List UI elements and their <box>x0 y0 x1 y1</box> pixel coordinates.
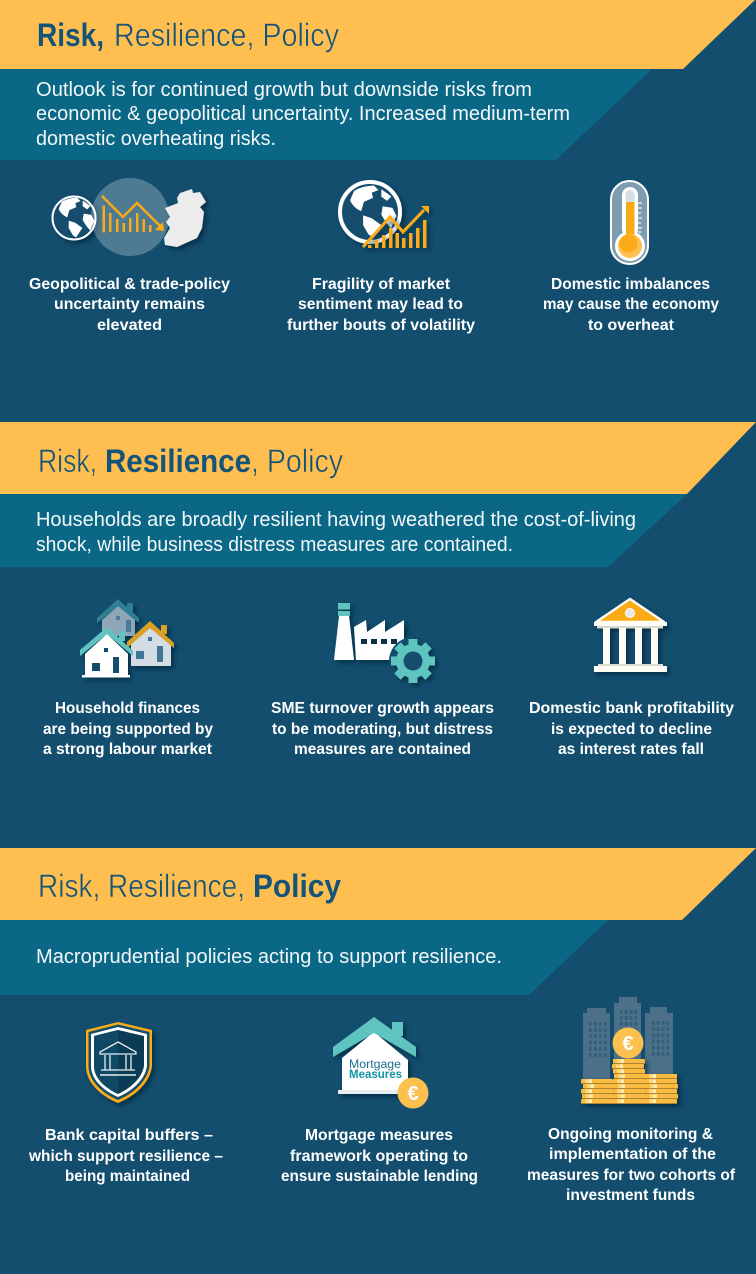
caption: market sentiment: further bouts of volatility <box>287 317 475 334</box>
icon: mortgage measures house: Measures <box>349 1067 402 1081</box>
caption: geopolitical: elevated <box>97 317 162 334</box>
caption: geopolitical: Geopolitical & trade-policy <box>29 276 230 293</box>
icon: houses <box>80 599 174 678</box>
intro text: resilience: Households are broadly resilient having weathered the cost-of-living <box>36 509 636 531</box>
heading: risk <box>37 17 339 53</box>
intro text: risk: Outlook is for continued growth but downside risks from <box>36 79 532 101</box>
heading: resilience: Resilience <box>105 443 251 479</box>
caption: bank profitability: is expected to decline <box>551 721 712 738</box>
icon: mortgage measures house: € <box>407 1083 419 1105</box>
panel: policy <box>0 848 756 1204</box>
intro band: resilience <box>0 494 687 567</box>
caption: sme turnover <box>271 700 494 758</box>
heading: risk: Risk, <box>37 17 104 53</box>
caption: capital buffers: being maintained <box>65 1168 190 1185</box>
caption: sme turnover: measures are contained <box>294 741 471 758</box>
caption: geopolitical <box>29 276 230 334</box>
caption: investment funds: implementation of the <box>549 1146 716 1163</box>
icon: buildings and coin stacks <box>581 997 678 1104</box>
icon: thermometer <box>611 181 648 264</box>
heading band: risk <box>0 0 755 69</box>
heading: policy: Policy <box>253 868 341 904</box>
icon: buildings and coin stacks: € <box>622 1033 634 1055</box>
heading: resilience: Risk, <box>38 443 97 479</box>
icon: factory and gear <box>334 603 437 685</box>
caption: investment funds: measures for two cohorts of <box>527 1167 736 1184</box>
icon: globe with rising chart <box>340 182 429 248</box>
caption: household finances: Household finances <box>55 700 200 717</box>
caption: capital buffers: which support resilience – <box>28 1148 223 1165</box>
caption: investment funds: investment funds <box>566 1187 695 1204</box>
icon: bank <box>594 599 667 672</box>
intro text: risk: domestic overheating risks. <box>36 128 276 150</box>
icon: mortgage measures house <box>333 1017 428 1108</box>
intro text: policy: Macroprudential policies acting to support resilience. <box>36 946 502 968</box>
heading band: resilience <box>0 422 756 494</box>
icon: shield with bank <box>86 1022 152 1103</box>
caption: mortgage framework: Mortgage measures <box>305 1127 453 1144</box>
caption: household finances: are being supported by <box>43 721 213 738</box>
caption: market sentiment: Fragility of market <box>312 276 450 293</box>
panel: risk <box>0 0 755 334</box>
intro band: policy <box>0 920 608 995</box>
panel: resilience <box>0 422 756 758</box>
intro text: resilience: shock, while business distress measures are contained. <box>36 534 513 556</box>
icon: mortgage measures house: Mortgage <box>349 1057 401 1071</box>
intro text: resilience <box>36 509 636 556</box>
caption: geopolitical: uncertainty remains <box>54 296 205 313</box>
caption: market sentiment: sentiment may lead to <box>298 296 463 313</box>
caption: domestic imbalances <box>543 276 719 334</box>
heading: resilience: , Policy <box>251 443 343 479</box>
caption: capital buffers: Bank capital buffers – <box>45 1127 213 1144</box>
caption: bank profitability: as interest rates fall <box>558 741 704 758</box>
caption: mortgage framework: framework operating to <box>290 1148 468 1165</box>
caption: domestic imbalances: to overheat <box>588 317 674 334</box>
heading: policy: Risk, Resilience, <box>38 868 245 904</box>
caption: sme turnover: SME turnover growth appears <box>271 700 494 717</box>
heading: resilience <box>38 443 343 479</box>
caption: household finances: a strong labour market <box>43 741 212 758</box>
intro band: risk <box>0 69 652 160</box>
caption: household finances <box>43 700 213 758</box>
caption: capital buffers <box>28 1127 223 1185</box>
caption: bank profitability <box>529 700 734 758</box>
intro text: risk <box>36 79 570 150</box>
caption: domestic imbalances: may cause the economy <box>543 296 719 313</box>
intro text: risk: economic & geopolitical uncertainty. Increased medium-term <box>36 103 570 125</box>
heading: risk: Resilience, Policy <box>114 17 339 53</box>
caption: domestic imbalances: Domestic imbalances <box>551 276 710 293</box>
caption: investment funds: Ongoing monitoring & <box>548 1126 713 1143</box>
caption: bank profitability: Domestic bank profitability <box>529 700 734 717</box>
caption: sme turnover: to be moderating, but distress <box>272 721 493 738</box>
caption: mortgage framework <box>281 1127 478 1185</box>
caption: mortgage framework: ensure sustainable lending <box>281 1168 478 1185</box>
heading band: policy <box>0 848 756 920</box>
caption: market sentiment <box>287 276 475 334</box>
caption: investment funds <box>527 1126 736 1204</box>
icon: globe, falling chart and Ireland <box>52 178 206 256</box>
